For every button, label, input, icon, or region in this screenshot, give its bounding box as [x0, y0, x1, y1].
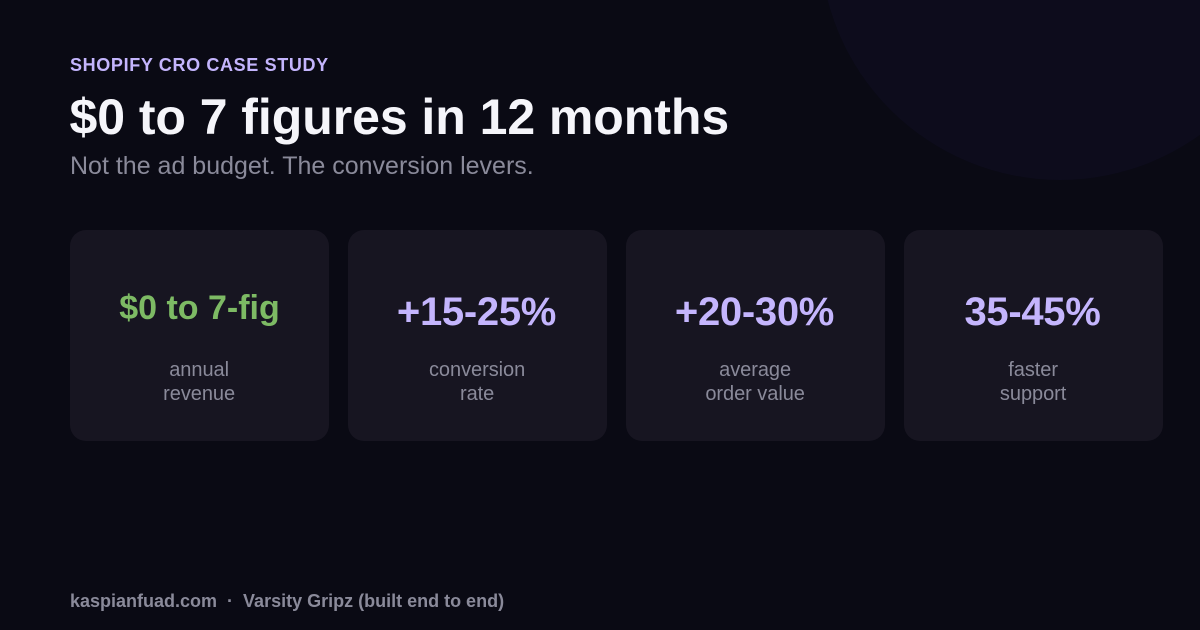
value: +15-25% [397, 290, 556, 334]
card: average order value [626, 230, 885, 441]
value: 35-45% [964, 290, 1101, 334]
label: average [719, 359, 791, 381]
label [163, 359, 235, 405]
title: $0 to 7 figures in 12 months [70, 89, 729, 145]
footer: kaspianfuad.com · Varsity Gripz (built end to end) [70, 591, 504, 611]
label [705, 359, 805, 405]
label: annual [169, 359, 229, 381]
label: conversion [429, 359, 525, 381]
label: support [1000, 383, 1066, 405]
card: annual revenue [70, 230, 329, 441]
value: +20-30% [675, 290, 834, 334]
label: faster [1008, 359, 1058, 381]
label [429, 359, 525, 405]
eyebrow: SHOPIFY CRO CASE STUDY [70, 55, 329, 75]
label [1000, 359, 1066, 405]
label: revenue [163, 383, 235, 405]
value: $0 to 7-fig [119, 289, 280, 327]
label: rate [460, 383, 494, 405]
label: order value [705, 383, 805, 405]
card: faster support [904, 230, 1163, 441]
card: conversion rate [348, 230, 607, 441]
subtitle: Not the ad budget. The conversion levers. [70, 152, 534, 180]
decorative background circle [820, 0, 1200, 180]
